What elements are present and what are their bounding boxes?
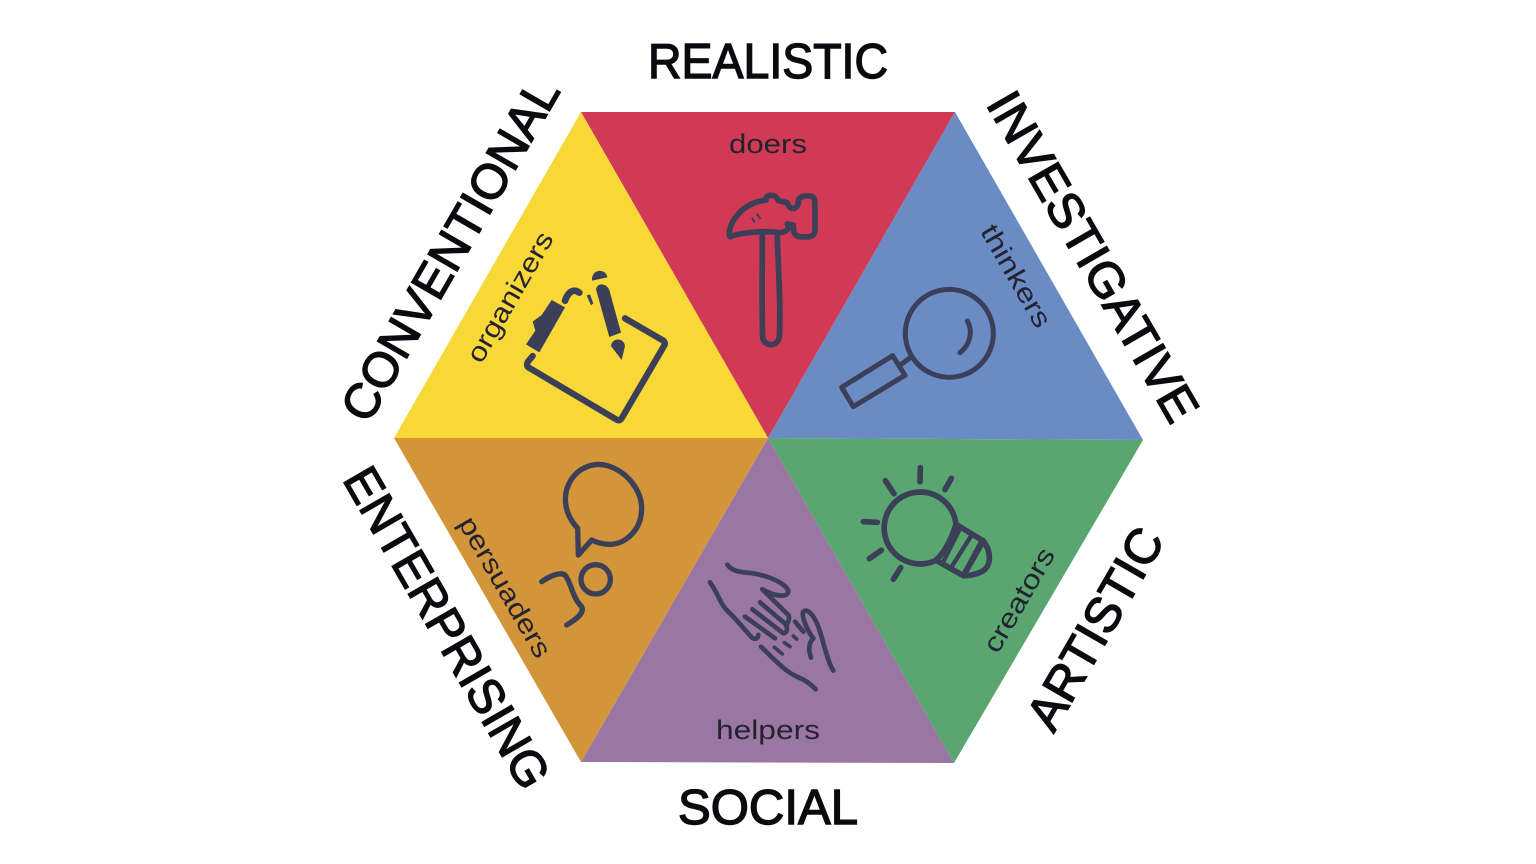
triangle: social [581,438,954,763]
triangle: artistic [768,438,1143,763]
icon: clipboard and pencil [526,271,665,420]
panel: enterprising [394,438,768,762]
label: organizers: organizers [461,226,559,368]
heading: artistic: ARTISTIC [1016,519,1175,739]
panel: artistic [768,438,1143,763]
label: persuaders: persuaders [453,511,557,663]
icon: person with speech bubble [542,464,642,625]
heading: realistic: REALISTIC [648,35,888,89]
triangle: conventional [394,112,768,438]
icon: light bulb [863,468,989,579]
triangle: investigative [768,112,1143,440]
heading: enterprising: ENTERPRISING [332,458,560,798]
heading: social: SOCIAL [678,781,858,835]
icon: magnifying glass [842,289,993,407]
icon: helping hands [710,565,833,689]
panel: realistic [581,112,955,438]
icon: hammer [729,195,815,345]
label: creators: creators [977,542,1061,658]
triangle: realistic [581,112,955,438]
label: helpers: helpers [716,715,820,745]
heading: conventional: CONVENTIONAL [331,69,571,431]
heading: investigative: INVESTIGATIVE [976,82,1209,432]
triangle: enterprising [394,438,768,762]
panel: conventional [394,112,768,438]
panel: investigative [768,112,1143,440]
label: doers: doers [729,129,807,159]
panel: social [581,438,954,763]
label: thinkers: thinkers [975,219,1057,333]
